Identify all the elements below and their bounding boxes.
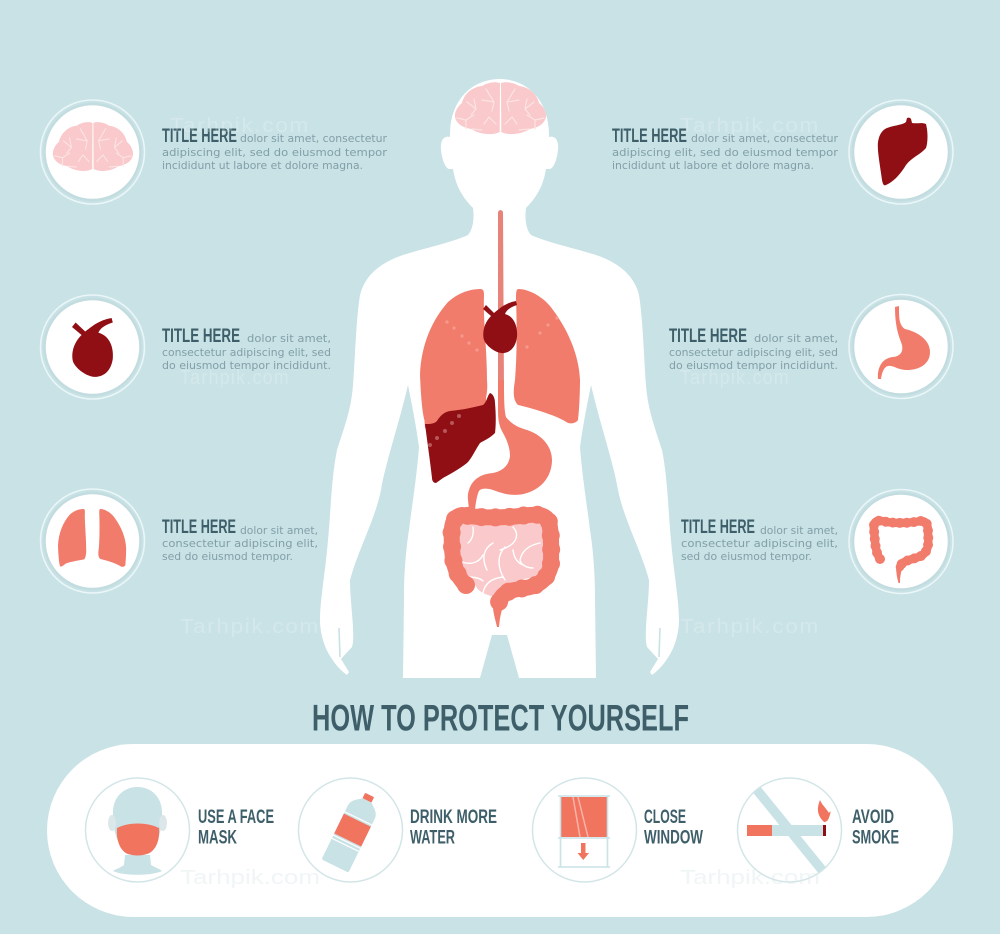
text: intestine: TITLE HERE xyxy=(681,516,755,538)
label: face mask: USE A FACE xyxy=(198,806,274,828)
small intestine xyxy=(452,516,548,596)
icon: liver xyxy=(849,100,953,204)
body silhouette xyxy=(320,79,679,678)
text: liver: dolor sit amet, consectetur xyxy=(691,133,839,145)
watermarks: Tarhpik.com xyxy=(180,367,290,389)
tip: face mask xyxy=(86,778,274,882)
text: brain: dolor sit amet, consectetur xyxy=(240,133,388,145)
text: intestine: dolor sit amet, xyxy=(760,525,838,537)
text: intestine: consectetur adipiscing elit, xyxy=(681,538,838,550)
text: stomach xyxy=(669,325,838,372)
panel: brain xyxy=(40,100,388,204)
text: lungs xyxy=(162,516,318,563)
icon: intestine xyxy=(849,490,953,594)
tip: avoid smoke xyxy=(738,778,899,882)
icon: lungs xyxy=(40,489,144,593)
icon: water bottle xyxy=(298,778,402,882)
text: intestine: sed do eiusmod tempor. xyxy=(681,551,812,563)
text: stomach: dolor sit amet, xyxy=(754,333,838,345)
left lung xyxy=(420,289,487,428)
label: avoid smoke: SMOKE xyxy=(852,826,899,848)
text: heart: consectetur adipiscing elit, sed xyxy=(162,347,331,359)
text: brain: incididunt ut labore et dolore magna. xyxy=(162,160,363,172)
icon: face mask xyxy=(86,778,190,882)
watermarks: Tarhpik.com xyxy=(180,616,320,638)
text: intestine xyxy=(681,516,838,563)
icon: window xyxy=(532,778,636,882)
text: lungs: dolor sit amet, xyxy=(240,525,318,537)
text: heart xyxy=(162,325,331,372)
text: heart: do eiusmod tempor incididunt. xyxy=(162,360,331,372)
label: drink water xyxy=(410,806,497,848)
panel: intestine xyxy=(681,490,953,594)
text: liver xyxy=(612,125,839,172)
tip: drink water xyxy=(298,778,497,882)
text: lungs: TITLE HERE xyxy=(162,516,236,538)
esophagus xyxy=(498,210,504,392)
text: liver: adipiscing elit, sed do eiusmod tempor xyxy=(612,147,839,159)
text: liver: incididunt ut labore et dolore magna. xyxy=(612,160,814,172)
label: avoid smoke: AVOID xyxy=(852,806,894,828)
panel: protection tips xyxy=(47,744,953,917)
label: close window xyxy=(644,806,703,848)
text: brain xyxy=(162,125,388,172)
text: liver: TITLE HERE xyxy=(612,125,687,147)
text: stomach: consectetur adipiscing elit, sed xyxy=(669,347,838,359)
text: lungs: sed do eiusmod tempor. xyxy=(162,551,293,563)
watermarks: Tarhpik.com xyxy=(680,367,790,389)
panel: stomach xyxy=(669,294,953,398)
human body with organs xyxy=(320,79,679,678)
label: face mask: MASK xyxy=(198,826,237,848)
text: stomach: do eiusmod tempor incididunt. xyxy=(669,360,838,372)
watermarks xyxy=(170,115,820,889)
watermarks: Tarhpik.com xyxy=(680,616,820,638)
text: stomach: TITLE HERE xyxy=(669,325,747,347)
icon: no smoking xyxy=(738,778,842,882)
label: avoid smoke xyxy=(852,806,899,848)
large intestine xyxy=(452,515,551,627)
liver dots xyxy=(428,414,461,447)
heading: HOW TO PROTECT YOURSELF xyxy=(312,696,689,738)
panel: liver xyxy=(612,100,953,204)
text: heart: TITLE HERE xyxy=(162,325,240,347)
brain xyxy=(455,82,546,134)
stomach xyxy=(468,380,552,509)
icon: brain xyxy=(40,100,144,204)
icon: stomach xyxy=(849,294,953,398)
text: brain: adipiscing elit, sed do eiusmod tempor xyxy=(162,147,388,159)
watermarks: Tarhpik.com xyxy=(180,867,320,889)
label: face mask xyxy=(198,806,274,848)
label: close window: CLOSE xyxy=(644,806,686,828)
lung dots xyxy=(445,316,559,352)
liver xyxy=(425,393,496,483)
watermarks: Tarhpik.com xyxy=(680,867,820,889)
panel: lungs xyxy=(40,489,318,593)
label: close window: WINDOW xyxy=(644,826,703,848)
icon: heart xyxy=(40,295,144,399)
label: drink water: WATER xyxy=(410,826,455,848)
label: drink water: DRINK MORE xyxy=(410,806,497,828)
tip: close window xyxy=(532,778,703,882)
right lung xyxy=(514,289,580,423)
watermarks: Tarhpik.com xyxy=(680,115,820,137)
heart xyxy=(483,301,517,353)
text: heart: dolor sit amet, xyxy=(247,333,331,345)
watermarks: Tarhpik.com xyxy=(170,115,310,137)
panel: heart xyxy=(40,295,331,399)
text: lungs: consectetur adipiscing elit, xyxy=(162,538,318,550)
text: brain: TITLE HERE xyxy=(162,125,237,147)
